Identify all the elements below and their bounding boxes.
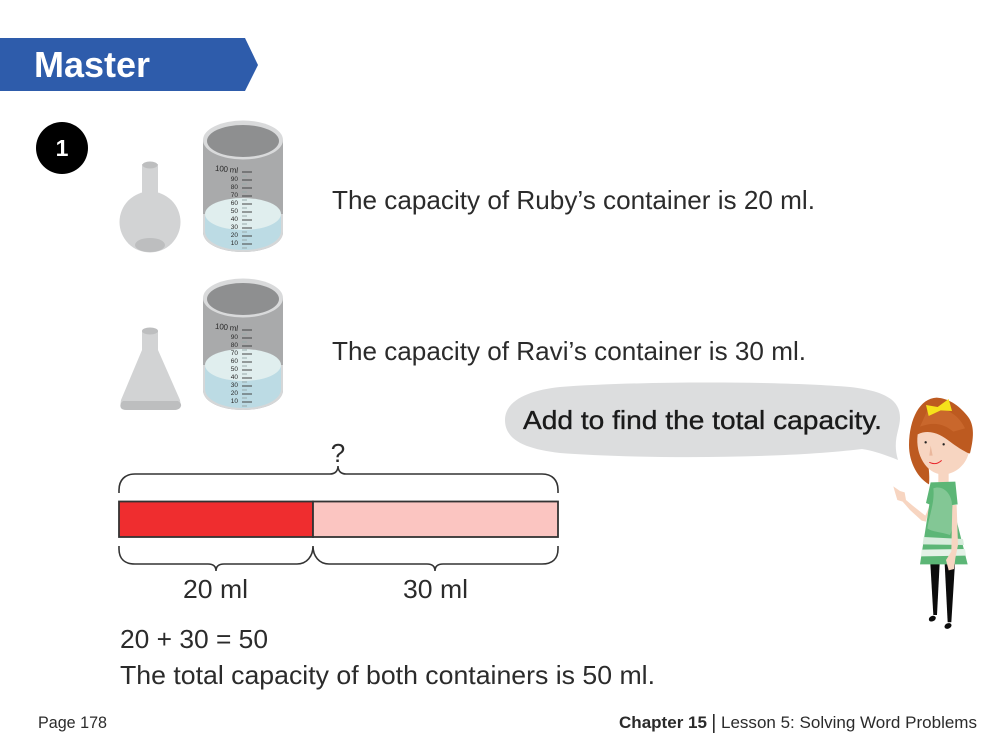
icon: beaker with 30 ml of water: 80 — [231, 342, 238, 349]
icon: round flask — [120, 162, 180, 252]
question number badge — [36, 122, 88, 174]
facial features — [924, 441, 927, 443]
speech bubble: Add to find the total capacity. — [523, 405, 882, 435]
icon: beaker with 20 ml of water: 100 ml — [215, 164, 239, 175]
icon: beaker with 20 ml of water: 40 — [231, 216, 238, 223]
icon: beaker with 20 ml of water: 90 — [231, 176, 238, 183]
icon: beaker with 30 ml of water: 30 — [231, 382, 238, 389]
icon: beaker with 30 ml of water — [203, 278, 283, 410]
part: 30 ml — [313, 502, 558, 537]
icon: beaker with 30 ml of water: 70 — [231, 350, 238, 357]
icon: beaker with 20 ml of water: 70 — [231, 192, 238, 199]
equation: 20 + 30 = 50 — [120, 624, 268, 654]
icon: beaker with 30 ml of water: 100 ml — [215, 322, 239, 333]
icon: beaker with 20 ml of water: 50 — [231, 208, 238, 215]
icon: beaker with 30 ml of water: 10 — [231, 398, 238, 405]
legs and shoes — [928, 563, 955, 630]
icon: beaker with 20 ml of water: 80 — [231, 184, 238, 191]
answer sentence: The total capacity of both containers is 50 ml. — [120, 660, 655, 690]
footer: chapter and lesson: Lesson 5: Solving Word Problems — [721, 713, 977, 732]
text: Ruby's container: The capacity of Ruby’s container is 20 ml. — [332, 185, 815, 215]
icon: beaker with 30 ml of water: 60 — [231, 358, 238, 365]
neck and face — [938, 470, 949, 483]
icon: beaker with 30 ml of water: 50 — [231, 366, 238, 373]
text: Ravi's container: The capacity of Ravi’s container is 30 ml. — [332, 336, 806, 366]
right arm — [946, 505, 958, 570]
bow — [926, 399, 952, 416]
icon: beaker with 30 ml of water: 20 — [231, 390, 238, 397]
pointing arm — [893, 486, 930, 522]
label: 20 ml: 20 ml — [183, 574, 248, 604]
header banner: Master — [0, 38, 258, 91]
dress — [920, 482, 968, 564]
question mark label: ? — [331, 438, 345, 468]
bottom braces — [119, 546, 558, 571]
footer: page number: Page 178 — [38, 713, 107, 732]
tape diagram with braces — [119, 438, 558, 604]
question number badge: 1 — [56, 135, 69, 161]
speech bubble — [505, 382, 900, 460]
part: 20 ml — [119, 502, 313, 537]
back hair — [909, 398, 973, 484]
footer: chapter and lesson: Chapter 15 — [619, 713, 707, 732]
character: girl in green dress pointing — [893, 398, 973, 630]
icon: beaker with 30 ml of water: 40 — [231, 374, 238, 381]
top brace — [119, 466, 558, 493]
icon: conical flask — [120, 328, 181, 410]
icon: beaker with 20 ml of water — [203, 120, 283, 252]
footer: chapter and lesson — [619, 713, 977, 733]
icon: beaker with 20 ml of water: 60 — [231, 200, 238, 207]
icon: beaker with 20 ml of water: 30 — [231, 224, 238, 231]
icon: beaker with 20 ml of water: 10 — [231, 240, 238, 247]
header banner: Master: Master — [34, 44, 150, 85]
icon: beaker with 20 ml of water: 20 — [231, 232, 238, 239]
icon: beaker with 30 ml of water: 90 — [231, 334, 238, 341]
label: 30 ml: 30 ml — [403, 574, 468, 604]
